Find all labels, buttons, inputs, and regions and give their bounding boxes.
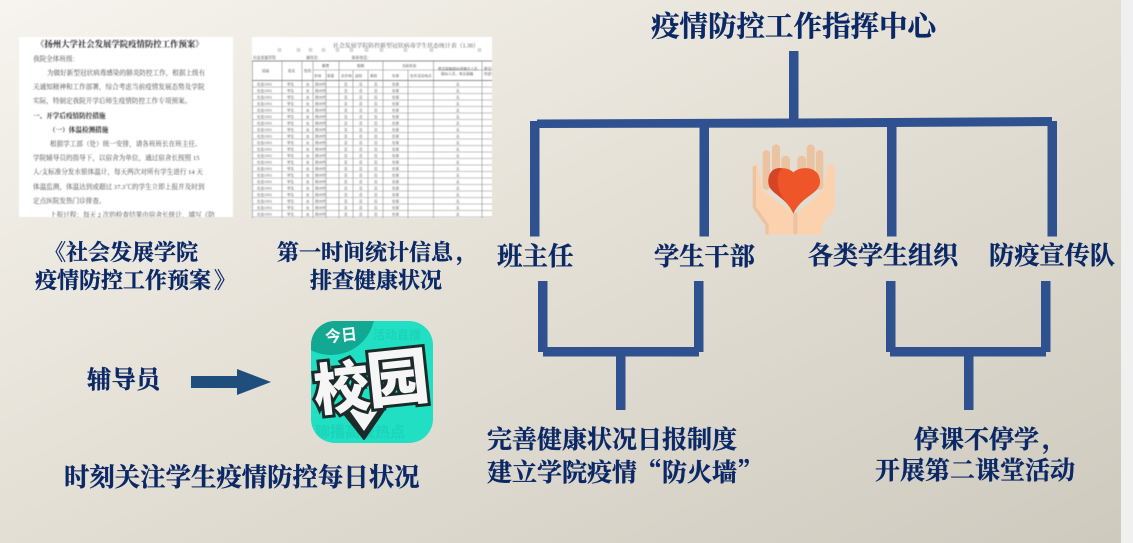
- app name: 校: [311, 354, 373, 423]
- table data rows: 否: [359, 186, 363, 190]
- app background: [311, 321, 433, 443]
- caption: prevention plan: 疫情防控工作预案》: [35, 268, 236, 293]
- table data rows: 学生: [287, 172, 295, 178]
- table data rows: 否: [359, 167, 363, 171]
- table data rows: 学生: [287, 94, 295, 100]
- icon: campus app: [311, 321, 433, 443]
- bracket: left pair: [538, 281, 704, 410]
- table data rows: 女: [306, 198, 310, 204]
- table data rows: 否: [359, 200, 363, 204]
- outcome text: online classes: 停课不停学，: [914, 427, 1067, 454]
- table data rows: 学生: [287, 134, 295, 138]
- table grid: [252, 61, 492, 218]
- table data rows: 否: [374, 174, 378, 178]
- document body text: 根据学工部（处）统一安排，请各班班长在班主任、: [50, 141, 202, 148]
- table data rows: 否: [374, 102, 378, 106]
- table data rows: 否: [359, 154, 363, 158]
- table data rows: 无: [456, 154, 460, 158]
- table data rows: 否: [344, 212, 348, 216]
- table data rows: 无: [456, 96, 460, 100]
- table data rows: 否: [344, 102, 348, 106]
- table data rows: 学生: [287, 179, 295, 184]
- table data rows: 否: [344, 134, 348, 138]
- table data rows: 学生: [287, 166, 295, 171]
- table data rows: 社会1901: [257, 108, 272, 112]
- title: 疫情防控工作指挥中心: [651, 12, 936, 43]
- document body text: 学院辅导员的指导下，以宿舍为单位，通过宿舍长按照 15: [33, 155, 200, 162]
- table data rows: 否: [374, 180, 378, 184]
- table data rows: 否: [344, 108, 348, 112]
- table data rows: 扬州市: [315, 186, 326, 190]
- table data rows: 在家: [392, 179, 400, 184]
- table header labels: 性别: [304, 68, 312, 73]
- table data rows: 否: [374, 212, 378, 216]
- outcome text: online classes: 开展第二课堂活动: [875, 458, 1075, 485]
- table data rows: 学生: [287, 101, 295, 106]
- table data rows: 在家: [392, 94, 400, 100]
- table data rows: 否: [359, 180, 363, 184]
- table data rows: 社会1901: [257, 127, 272, 132]
- table data rows: 否: [374, 206, 378, 210]
- table data rows: 学生: [287, 186, 295, 190]
- document image: epidemic prevention plan: [19, 37, 233, 217]
- table data rows: 女: [306, 140, 310, 145]
- table data rows: 扬州市: [315, 205, 326, 210]
- table data rows: 女: [306, 120, 310, 126]
- table data rows: 学生: [287, 192, 295, 197]
- table data rows: 否: [344, 154, 348, 158]
- table data rows: 在家: [392, 101, 400, 106]
- table data rows: 在家: [392, 153, 400, 158]
- table data rows: 社会1901: [257, 120, 272, 126]
- table data rows: 社会1901: [257, 198, 272, 204]
- table data rows: 否: [359, 108, 363, 112]
- fingers: [763, 144, 823, 190]
- document body text: 定点医院发热门诊排查。: [33, 198, 106, 205]
- outcome text: health reporting: [487, 426, 762, 489]
- table data rows: 在家: [392, 140, 400, 145]
- heart shadow: [768, 168, 787, 203]
- table header labels: 在外活动地点: [410, 73, 432, 78]
- table data rows: 否: [359, 141, 363, 145]
- outcome text: health reporting: 建立学院疫情“防火墙”: [487, 453, 762, 489]
- caption: daily status: 时刻关注学生疫情防控每日状况: [64, 464, 419, 492]
- table data rows: 扬州市: [315, 114, 326, 119]
- table data rows: 学生: [287, 212, 295, 216]
- table image: student health statistics: [252, 37, 492, 218]
- table data rows: 扬州市: [315, 153, 326, 158]
- table data rows: 否: [359, 96, 363, 100]
- table data rows: 无: [456, 174, 460, 178]
- table header labels: 当前状态: [402, 63, 417, 68]
- table data rows: 无: [456, 148, 460, 152]
- document body text: 关通知精神和工作部署，综合考虑当前疫情发展态势及学院: [33, 84, 204, 91]
- table data rows: 否: [374, 89, 378, 93]
- table data rows: 扬州市: [315, 192, 326, 197]
- table data rows: 无: [456, 122, 460, 126]
- corner badge: [311, 321, 374, 355]
- table data rows: 女: [306, 212, 310, 216]
- table data rows: 女: [306, 179, 310, 184]
- caption: collect statistics: [277, 240, 478, 293]
- table data rows: 学生: [287, 140, 295, 145]
- table header labels: 姓名: [288, 68, 296, 73]
- table data rows: 社会1901: [257, 82, 272, 86]
- app name: [310, 342, 432, 423]
- table data rows: 否: [359, 160, 363, 164]
- caption: prevention plan: [35, 240, 236, 293]
- table data rows: 扬州市: [315, 166, 326, 171]
- table data rows: 社会1901: [257, 212, 272, 216]
- table data rows: 无: [456, 141, 460, 145]
- table data rows: 在家: [392, 146, 400, 152]
- table data rows: 学生: [287, 198, 295, 204]
- table data rows: 否: [374, 186, 378, 190]
- document body text: 我院全体班级：: [33, 56, 79, 63]
- check tail highlight: [350, 408, 378, 431]
- table data rows: 在家: [392, 186, 400, 190]
- table data rows: 无: [456, 134, 460, 138]
- table data rows: 扬州市: [315, 179, 326, 184]
- table data rows: 否: [359, 134, 363, 138]
- table data rows: 扬州市: [315, 88, 326, 93]
- caption: prevention plan: 《社会发展学院: [44, 240, 198, 265]
- table data rows: 在家: [392, 166, 400, 171]
- label: student cadres: 学生干部: [654, 244, 755, 271]
- hands: [753, 164, 835, 234]
- table header labels: 疑似人员，有无接触: [441, 71, 474, 76]
- table data rows: 扬州市: [315, 120, 326, 126]
- table data rows: 无: [456, 108, 460, 112]
- badge text: 今日: [324, 324, 358, 347]
- table data rows: 无: [456, 186, 460, 190]
- label: student organizations: 各类学生组织: [808, 243, 958, 270]
- document body text: 一、开学后疫情防控措施: [33, 113, 106, 120]
- table data rows: 否: [374, 167, 378, 171]
- table data rows: 否: [374, 141, 378, 145]
- table data rows: 否: [344, 186, 348, 190]
- table data rows: 学生: [287, 127, 295, 132]
- table data rows: 否: [359, 82, 363, 86]
- document body text: 实际，特制定我院开学后师生疫情防控工作专项预案。: [33, 98, 191, 105]
- table data rows: 否: [374, 122, 378, 126]
- table header labels: 去外地: [341, 73, 352, 78]
- table data rows: 扬州市: [315, 146, 326, 152]
- table data rows: 否: [359, 128, 363, 132]
- table data rows: 女: [306, 114, 310, 119]
- table data rows: 否: [374, 108, 378, 112]
- table data rows: 社会1901: [257, 186, 272, 190]
- table data rows: 学生: [287, 108, 295, 112]
- table data rows: 社会1901: [257, 166, 272, 171]
- table data rows: 否: [344, 141, 348, 145]
- table data rows: 扬州市: [315, 108, 326, 112]
- table header labels: 离校: [370, 73, 378, 78]
- table data rows: 无: [456, 193, 460, 197]
- table data rows: 在家: [392, 127, 400, 132]
- table data rows: 女: [306, 205, 310, 210]
- table data rows: 否: [359, 174, 363, 178]
- table data rows: 无: [456, 102, 460, 106]
- table data rows: 在家: [392, 205, 400, 210]
- table data rows: [257, 82, 460, 216]
- document body text: 为做好新型冠状病毒感染的肺炎防控工作，根据上级有: [47, 70, 205, 77]
- table data rows: 扬州市: [315, 198, 326, 204]
- table data rows: 否: [344, 200, 348, 204]
- table data rows: 否: [359, 89, 363, 93]
- table data rows: 否: [359, 115, 363, 119]
- table data rows: 否: [344, 128, 348, 132]
- table header labels: 籍贯: [322, 63, 330, 68]
- table data rows: 女: [306, 101, 310, 106]
- table data rows: 否: [374, 160, 378, 164]
- table data rows: 否: [344, 115, 348, 119]
- table data rows: 扬州市: [315, 212, 326, 216]
- table data rows: 女: [306, 108, 310, 112]
- table data rows: 否: [344, 96, 348, 100]
- table header labels: 本地: [314, 73, 322, 78]
- table data rows: 女: [306, 192, 310, 197]
- table data rows: 女: [306, 134, 310, 138]
- table data rows: 女: [306, 146, 310, 152]
- table data rows: 社会1901: [257, 94, 272, 100]
- heart: [768, 168, 820, 214]
- document title: 《扬州大学社会发展学院疫情防控工作预案》: [36, 40, 204, 49]
- faint background characters: 活动直播: [373, 327, 421, 342]
- table data rows: 否: [374, 82, 378, 86]
- table data rows: 学生: [287, 205, 295, 210]
- table title: 社会发展学院防控新型冠状病毒学生状态统计表（1.30）: [333, 42, 479, 50]
- table data rows: 无: [456, 115, 460, 119]
- table data rows: 社会1901: [257, 140, 272, 145]
- table data rows: 学生: [287, 146, 295, 152]
- table subtitle row: 社会发展学院 辅导员： 联系电话：: [253, 55, 371, 60]
- table data rows: 学生: [287, 160, 295, 164]
- table data rows: 无: [456, 82, 460, 86]
- table data rows: 否: [344, 82, 348, 86]
- outcome text: health reporting: 完善健康状况日报制度: [487, 427, 737, 454]
- app name: 园: [364, 342, 432, 417]
- table data rows: 否: [359, 122, 363, 126]
- table data rows: 否: [374, 148, 378, 152]
- table header labels: 是否接触疑似或确诊人员、: [438, 66, 481, 71]
- table data rows: 扬州市: [315, 134, 326, 138]
- table data rows: 社会1901: [257, 101, 272, 106]
- table data rows: 社会1901: [257, 146, 272, 152]
- table data rows: 无: [456, 212, 460, 216]
- table data rows: 否: [344, 174, 348, 178]
- table data rows: 否: [374, 96, 378, 100]
- document body text: 体温监测，体温达到或超过 37.3℃的学生立即上报并及时到: [33, 184, 204, 191]
- table data rows: 否: [344, 193, 348, 197]
- table data rows: 否: [344, 180, 348, 184]
- filter markers: [278, 48, 481, 52]
- label: counselor: 辅导员: [87, 367, 160, 394]
- table data rows: 否: [344, 148, 348, 152]
- table data rows: 无: [456, 160, 460, 164]
- table data rows: 学生: [287, 120, 295, 126]
- check tail: [344, 399, 386, 440]
- table data rows: 女: [306, 88, 310, 93]
- table data rows: 扬州市: [315, 172, 326, 178]
- table data rows: 社会1901: [257, 205, 272, 210]
- label: class teacher: 班主任: [497, 242, 574, 271]
- table header labels: 返校: [355, 73, 363, 78]
- org chart connectors: command to four groups: [530, 51, 1057, 236]
- table data rows: 扬州市: [315, 160, 326, 164]
- table data rows: 社会1901: [257, 172, 272, 178]
- table data rows: 社会1901: [257, 153, 272, 158]
- table header labels: 在家: [392, 73, 400, 78]
- table data rows: 扬州市: [315, 82, 326, 86]
- table data rows: 在家: [392, 198, 400, 204]
- table data rows: 否: [359, 148, 363, 152]
- table header labels: 假期: [357, 63, 365, 68]
- document body text: （一）体温检测措施: [49, 127, 108, 134]
- table data rows: 否: [374, 128, 378, 132]
- table data rows: 学生: [287, 88, 295, 93]
- table data rows: 在家: [392, 172, 400, 178]
- table data rows: 在家: [392, 108, 400, 112]
- hand shading: [753, 166, 797, 234]
- table data rows: 否: [344, 89, 348, 93]
- bracket: right pair: [886, 281, 1050, 410]
- document body text: 人/支标准分发水银体温计，每天两次对所有学生进行 14 天: [33, 169, 203, 176]
- arrow: counselor to app: [191, 369, 271, 395]
- table header labels: 家庭: [327, 73, 335, 78]
- table data rows: 女: [306, 186, 310, 190]
- table data rows: 学生: [287, 114, 295, 119]
- table data rows: 学生: [287, 153, 295, 158]
- table data rows: 无: [456, 89, 460, 93]
- table data rows: 女: [306, 82, 310, 86]
- table data rows: 社会1901: [257, 192, 272, 197]
- table data rows: 否: [344, 122, 348, 126]
- table data rows: 无: [456, 200, 460, 204]
- table data rows: 否: [374, 115, 378, 119]
- table data rows: 无: [456, 206, 460, 210]
- table data rows: 在家: [392, 192, 400, 197]
- table data rows: 扬州市: [315, 94, 326, 100]
- table data rows: 无: [456, 167, 460, 171]
- icon: hands holding heart: [752, 144, 835, 234]
- table data rows: 社会1901: [257, 179, 272, 184]
- table data rows: 社会1901: [257, 134, 272, 138]
- faint background characters, lower: 聊播高校热点: [315, 423, 405, 441]
- table data rows: 在家: [392, 114, 400, 119]
- label: publicity team: 防疫宣传队: [989, 243, 1115, 270]
- caption: collect statistics: 第一时间统计信息，: [277, 240, 478, 265]
- table data rows: 女: [306, 94, 310, 100]
- table data rows: 在家: [392, 82, 400, 86]
- table data rows: 在家: [392, 134, 400, 138]
- table data rows: 在家: [392, 88, 400, 93]
- table data rows: 女: [306, 160, 310, 164]
- table data rows: 女: [306, 153, 310, 158]
- caption: collect statistics: 排查健康状况: [310, 268, 442, 293]
- table data rows: 否: [344, 160, 348, 164]
- table data rows: 在家: [392, 120, 400, 126]
- table data rows: 否: [344, 206, 348, 210]
- table data rows: 否: [359, 212, 363, 216]
- table data rows: 否: [359, 193, 363, 197]
- table data rows: 扬州市: [315, 127, 326, 132]
- table data rows: 否: [374, 154, 378, 158]
- table data rows: 在家: [392, 212, 400, 216]
- outcome text: online classes: [875, 426, 1075, 485]
- table data rows: 否: [374, 200, 378, 204]
- table data rows: 否: [374, 193, 378, 197]
- table data rows: 扬州市: [315, 101, 326, 106]
- table header labels: 班级: [262, 68, 270, 73]
- table data rows: 女: [306, 127, 310, 132]
- table data rows: 否: [374, 134, 378, 138]
- table data rows: 社会1901: [257, 160, 272, 164]
- table data rows: 在家: [392, 160, 400, 164]
- table data rows: 否: [359, 206, 363, 210]
- table data rows: 女: [306, 166, 310, 171]
- table data rows: 扬州市: [315, 140, 326, 145]
- table data rows: 否: [359, 102, 363, 106]
- table data rows: 否: [344, 167, 348, 171]
- table data rows: 学生: [287, 82, 295, 86]
- table data rows: 社会1901: [257, 114, 272, 119]
- table data rows: 女: [306, 172, 310, 178]
- table data rows: 社会1901: [257, 88, 272, 93]
- document body text: [32, 54, 215, 218]
- table data rows: 无: [456, 180, 460, 184]
- table data rows: 无: [456, 128, 460, 132]
